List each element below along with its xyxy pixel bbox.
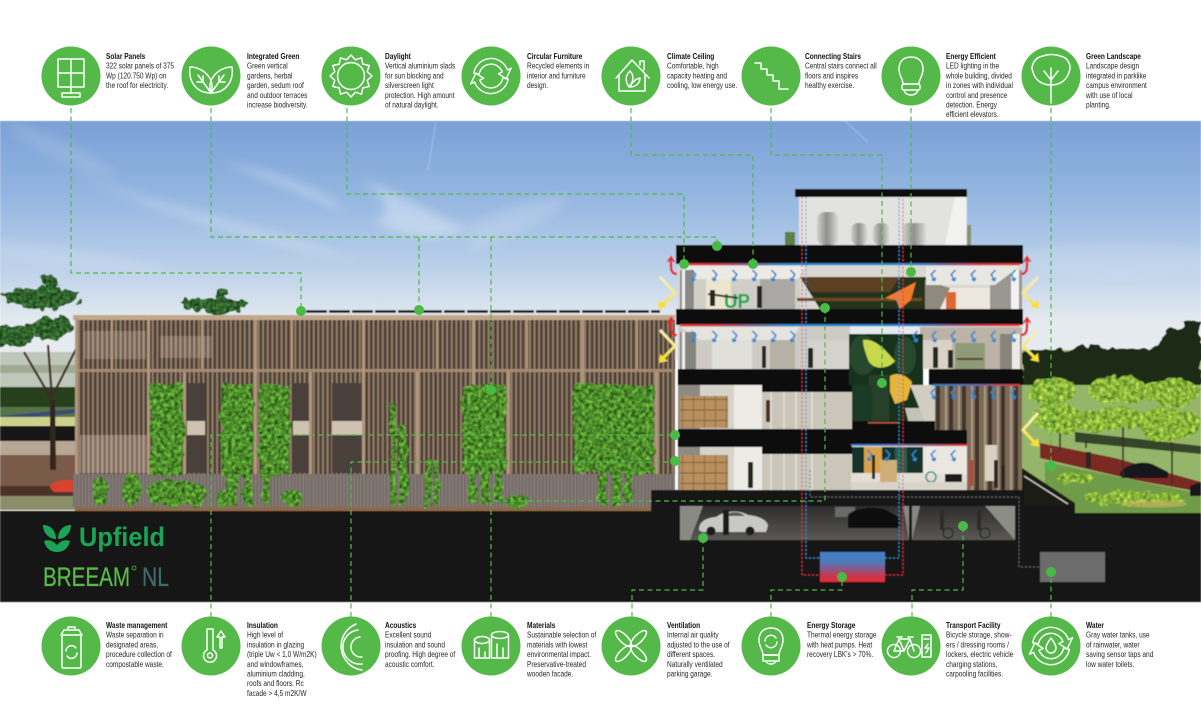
text: Materials: materials with lowest	[527, 640, 588, 650]
text: Transport Facility: charging stations,	[946, 659, 997, 669]
text: Waste management: Waste management	[106, 620, 168, 630]
base and underground (black)	[0, 490, 1201, 602]
text: Acoustics: Excellent sound	[385, 630, 431, 640]
red heat arrows	[668, 257, 1030, 335]
panel: Insulation	[182, 616, 317, 698]
text: Energy Efficient: LED lighting in the	[946, 61, 999, 71]
text: Acoustics: Acoustics	[385, 620, 416, 630]
text: Transport Facility: lockers, electric vehicle	[946, 649, 1013, 659]
text: Insulation: aluminium cladding,	[247, 669, 305, 679]
section: ground floor lobby and glazing	[851, 385, 1022, 490]
text: Insulation: roofs and floors. Rc	[247, 678, 304, 688]
text: Integrated Green: increase biodiversity.	[247, 100, 308, 110]
grey water tank	[1040, 552, 1105, 582]
icon: thermometer	[204, 629, 225, 662]
text: Water: Gray water tanks, use	[1086, 630, 1150, 640]
windows	[187, 383, 363, 473]
text: Water: Water	[1086, 620, 1104, 630]
icon: water cycle	[1029, 627, 1073, 665]
icon: stairs	[755, 63, 788, 89]
text: Daylight: Daylight	[385, 51, 411, 61]
text: Materials: Materials	[527, 620, 555, 630]
section: storage floors	[678, 385, 872, 490]
text: Circular Furniture: design.	[527, 80, 548, 90]
clouds	[0, 116, 1201, 278]
panel: Acoustics	[322, 616, 456, 676]
text: Climate Ceiling: cooling, low energy use.	[667, 80, 737, 90]
icon: bicycle and charger	[888, 635, 931, 658]
text: Climate Ceiling: capacity heating and	[667, 71, 727, 81]
right landscape	[1022, 320, 1201, 515]
text: Energy Storage: Energy Storage	[807, 620, 855, 630]
text: Circular Furniture: interior and furniture	[527, 71, 586, 81]
red car	[50, 480, 74, 492]
text: Daylight: silverscreen light	[385, 80, 435, 90]
text: Integrated Green: gardens, herbal	[247, 71, 293, 81]
icon: house with leaf	[616, 60, 649, 91]
text: Connecting Stairs: floors and inspires	[805, 71, 858, 81]
parked dark car	[848, 508, 900, 528]
icon: light bulb	[899, 57, 923, 95]
icon: leaves	[190, 67, 232, 93]
panel: Water	[1022, 616, 1153, 676]
solar panel row	[306, 310, 660, 313]
panel: Connecting Stairs	[742, 46, 877, 106]
text: Integrated Green: Integrated Green	[247, 51, 300, 61]
panel: Climate Ceiling	[602, 46, 737, 106]
logo: BREEAM NL: NL	[142, 562, 169, 592]
text: Ventilation: Naturally ventilated	[667, 659, 723, 669]
text: Transport Facility: Bicycle storage, show-	[946, 630, 1012, 640]
text: Connecting Stairs: Connecting Stairs	[805, 51, 861, 61]
text: Ventilation: Ventilation	[667, 620, 700, 630]
text: Materials: wooden facade.	[526, 669, 573, 679]
text: Ventilation: Internal air quality	[667, 630, 719, 640]
panel: Materials	[462, 616, 597, 679]
people	[710, 286, 1091, 489]
section: penthouse	[785, 189, 971, 245]
panel: Daylight	[322, 46, 455, 110]
text: Integrated Green: Green vertical	[247, 61, 288, 71]
panel: Transport Facility	[882, 616, 1013, 679]
icon: wooden logs	[474, 632, 508, 658]
text: Integrated Green: garden, sedum roof	[247, 80, 305, 90]
text: Energy Efficient: efficient elevators.	[946, 109, 999, 119]
sky	[0, 121, 1201, 360]
text: Transport Facility: Transport Facility	[946, 620, 1001, 630]
panel: Green Landscape	[1022, 46, 1148, 110]
connector end dots	[296, 241, 1056, 582]
left landscape	[0, 352, 80, 510]
text: Waste management: procedure collection of	[106, 649, 173, 659]
text: Green Landscape: planting.	[1086, 100, 1111, 110]
yellow natural ventilation arrows	[660, 277, 1038, 444]
panel: Integrated Green	[182, 46, 308, 110]
text: Connecting Stairs: healthy exercise.	[805, 80, 854, 90]
text: Water: low water toilets.	[1086, 659, 1134, 669]
text: Solar Panels: the roof for electricity.	[106, 80, 168, 90]
icon: circular arrows	[471, 58, 511, 94]
text: Ventilation: adjusted to the use of	[667, 640, 730, 650]
text: Materials: environmental impact.	[527, 649, 591, 659]
panel: Circular Furniture	[462, 46, 589, 106]
text: Energy Efficient: Energy Efficient	[946, 51, 996, 61]
text: Insulation: insulation in glazing	[247, 640, 304, 650]
text: Insulation: High level of	[247, 630, 284, 640]
panel: Energy Storage	[742, 616, 877, 676]
ground strip	[75, 507, 675, 511]
text: Daylight: of natural daylight.	[385, 100, 439, 110]
text: Circular Furniture: Recycled elements in	[527, 61, 589, 71]
UP lettering: UP	[724, 291, 750, 313]
text: Acoustics: proofing. High degree of	[385, 649, 456, 659]
wooden facade building	[73, 315, 675, 511]
text: Green Landscape: with use of local	[1085, 90, 1133, 100]
text: Energy Storage: with heat pumps. Heat	[806, 640, 873, 650]
text: Solar Panels: Wp (120.750 Wp) on	[106, 71, 166, 81]
text: Waste management: designated areas,	[106, 640, 158, 650]
text: Green Landscape: Green Landscape	[1086, 51, 1141, 61]
dashed connector lines	[71, 108, 1051, 617]
text: Solar Panels: 322 solar panels of 375	[106, 61, 174, 71]
panel: Waste management	[42, 616, 173, 676]
text: Daylight: Vertical aluminium slads	[385, 61, 455, 71]
text: Solar Panels: Solar Panels	[106, 51, 145, 61]
dotted heating and cooling pipes	[802, 197, 1040, 575]
blue air supply arrows	[691, 270, 1016, 461]
text: Acoustics: insulation and sound	[385, 640, 445, 650]
text: Connecting Stairs: Central stairs connect all	[805, 61, 877, 71]
text: Waste management: compostable waste.	[106, 659, 164, 669]
parked cars	[1120, 463, 1168, 478]
text: Energy Efficient: in zones with individual	[946, 80, 1013, 90]
logo: Upfield: Upfield	[79, 522, 165, 552]
icon: sound waves	[341, 624, 362, 670]
parking garage	[680, 506, 1015, 540]
text: Circular Furniture: Circular Furniture	[527, 51, 582, 61]
text: Transport Facility: carpooling facilities.	[946, 669, 1003, 679]
text: Transport Facility: ers / dressing rooms /	[946, 640, 1010, 650]
text: Materials: Sustainable selection of	[527, 630, 597, 640]
cyclists	[942, 510, 979, 530]
text: Energy Efficient: whole building, divided	[945, 71, 1012, 81]
jet trails	[428, 121, 868, 170]
text: Insulation: and windowframes,	[247, 659, 303, 669]
text: Energy Storage: recovery LBK's > 70%.	[807, 649, 873, 659]
left tree	[0, 275, 247, 470]
text: Ventilation: different spaces.	[667, 649, 715, 659]
panel: Solar Panels	[42, 46, 174, 106]
text: Ventilation: parking garage.	[667, 669, 713, 679]
text: Green Landscape: integrated in parklike	[1086, 71, 1146, 81]
section: second floor	[678, 264, 1022, 313]
icon: fan	[613, 628, 649, 664]
icon: waste bin	[61, 627, 82, 668]
section: first floor	[678, 325, 1022, 369]
text: Green Landscape: campus environment	[1086, 80, 1148, 90]
building scene	[0, 116, 1201, 602]
logo: BREEAM NL: BREEAM	[43, 562, 130, 592]
text: Energy Storage: Thermal energy storage	[807, 630, 877, 640]
icon: Upfield leaves	[43, 525, 71, 552]
text: Materials: Preservative-treated	[527, 659, 586, 669]
text: Energy Efficient: control and presence	[946, 90, 1007, 100]
text: Energy Efficient: detection. Energy	[946, 100, 997, 110]
facade frame posts	[75, 318, 658, 474]
text: Acoustics: acoustic comfort.	[385, 659, 434, 669]
text: Daylight: for sun blocking and	[385, 71, 444, 81]
icon: bulb with cycle	[759, 628, 783, 664]
text: Insulation: Insulation	[247, 620, 278, 630]
energy storage tank	[820, 552, 885, 582]
panel: Ventilation	[602, 616, 730, 679]
text: Integrated Green: and outdoor terraces	[247, 90, 308, 100]
text: Green Landscape: Landscape design	[1086, 61, 1139, 71]
structural floor slabs	[676, 245, 1023, 454]
yellow arrow heads	[658, 300, 1039, 447]
parked white car	[699, 511, 768, 532]
climate ceiling pipes	[680, 263, 1020, 446]
text: Climate Ceiling: Comfortable, high	[667, 61, 719, 71]
text: Climate Ceiling: Climate Ceiling	[667, 51, 715, 61]
text: Water: of rainwater, water	[1086, 640, 1140, 650]
panel: Energy Efficient	[882, 46, 1013, 119]
text: Insulation: (triple Uw < 1,0 W/m2K)	[247, 649, 317, 659]
logo: Upfield	[43, 522, 165, 552]
section: atrium green wall	[849, 334, 935, 428]
icon: solar panel	[58, 59, 84, 97]
text: Waste management: Waste separation in	[106, 630, 164, 640]
text: Daylight: protection. High amount	[385, 90, 455, 100]
text: Insulation: facade > 4,5 m2K/W	[247, 688, 307, 698]
vertical gardens	[92, 384, 654, 507]
icon: sun	[330, 55, 372, 97]
icon: tree	[1032, 54, 1070, 103]
text: Water: saving sensor taps and	[1086, 649, 1153, 659]
